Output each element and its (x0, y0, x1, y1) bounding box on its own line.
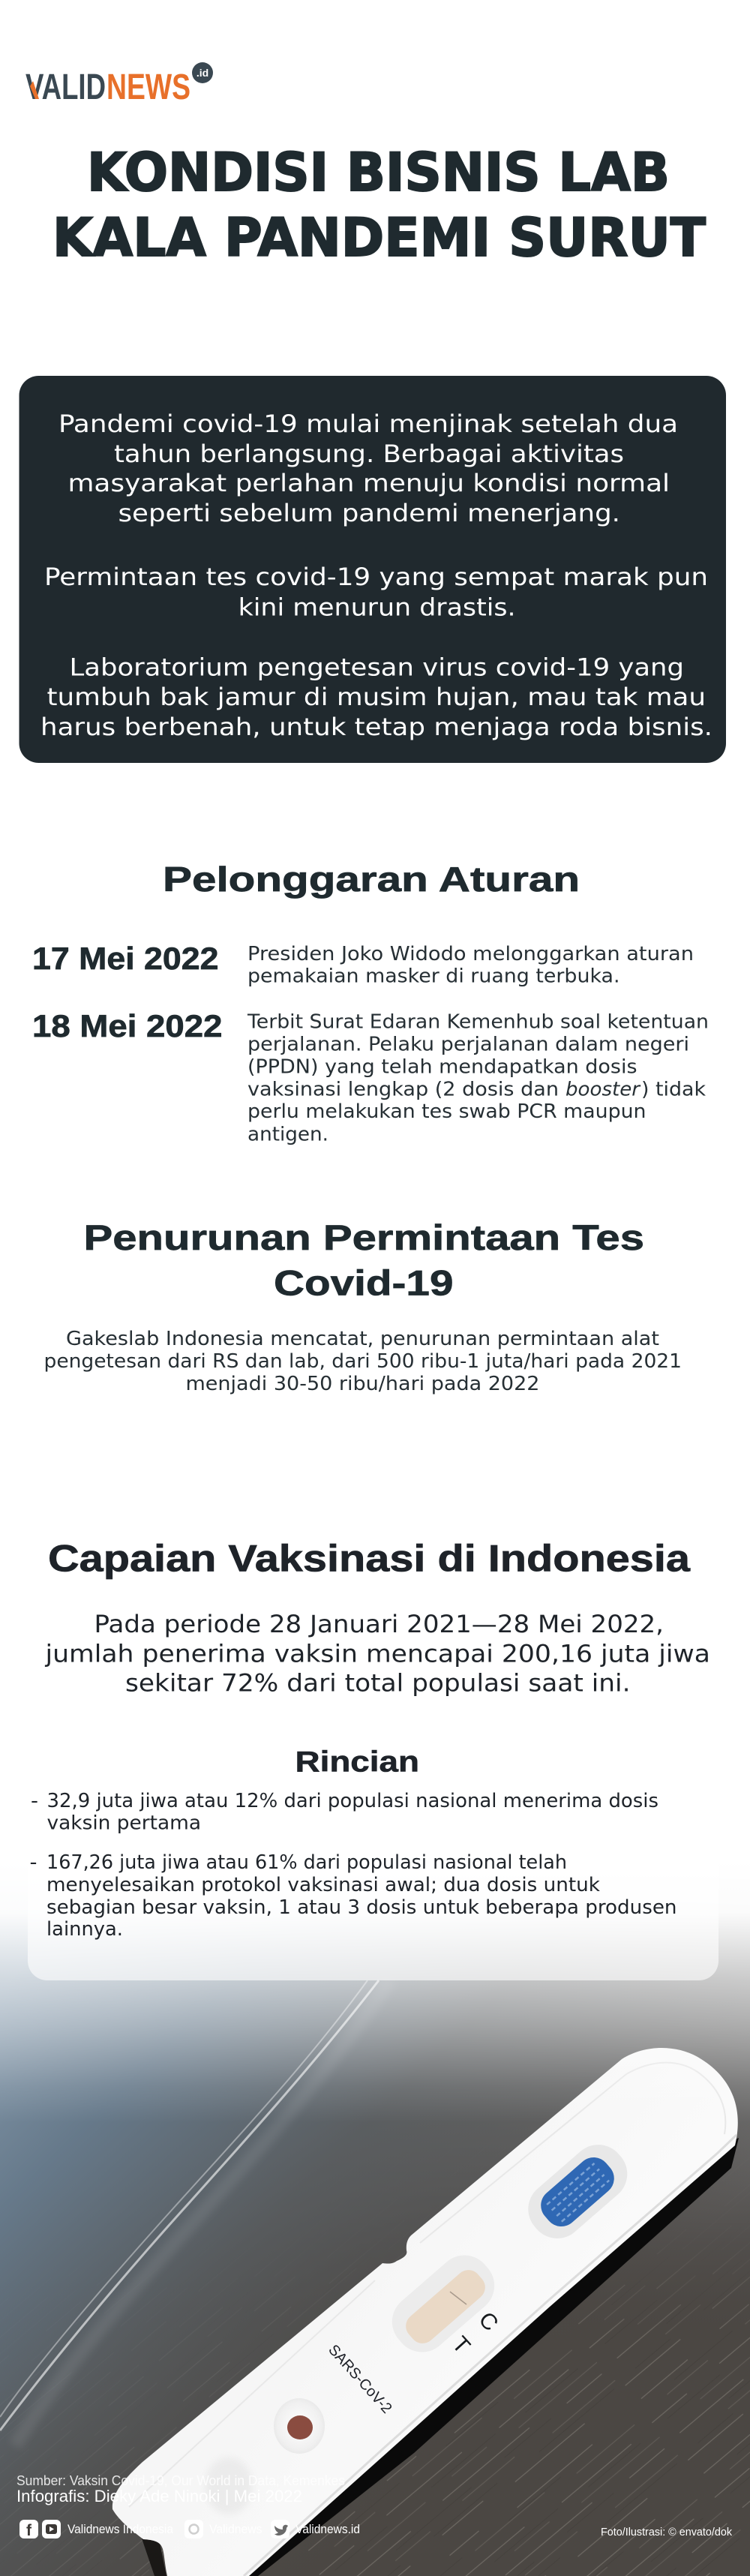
description 18 Mei: vaksinasi lengkap (2 dosis dan (248, 1079, 559, 1101)
description 18 Mei: (PPDN) yang telah mendapatkan dosis (248, 1056, 638, 1079)
list item 2 (30, 1851, 676, 1941)
test result window (400, 2265, 490, 2349)
list item 1: - (31, 1790, 38, 1812)
photo strip notch shadow (140, 2532, 166, 2576)
description 18 Mei: ) tidak (641, 1079, 706, 1101)
intro text: kini menurun drastis. (238, 593, 516, 621)
text: Gakeslab: pengetesan dari RS dan lab, dari 500 ribu-1 juta/hari pada 2021 (44, 1350, 682, 1373)
logo word NEWS: NEWS (106, 68, 190, 107)
photo upper grey reflection (0, 1860, 750, 2340)
photo glass streak (0, 1980, 390, 2445)
title (52, 142, 706, 269)
blue window recess (518, 2133, 638, 2250)
heading: Pelonggaran Aturan: Pelonggaran Aturan (163, 860, 580, 899)
panel: introduction (20, 376, 726, 763)
timeline: 18 Mei 2022 (32, 1008, 709, 1146)
intro text: Permintaan tes covid-19 yang sempat marak pun (44, 563, 708, 591)
description 18 Mei: Terbit Surat Edaran Kemenhub soal ketentuan (247, 1011, 709, 1034)
text: vaccination total: Pada periode 28 Januari 2021—28 Mei 2022, (94, 1610, 664, 1638)
text: Validnews.id: Validnews.id (296, 2522, 360, 2536)
intro text: harus berbenah, untuk tetap menjaga roda bisnis. (40, 713, 712, 741)
list: vaccination details (30, 1790, 676, 1941)
cassette side edge (244, 2135, 736, 2576)
list item 1: 32,9 juta jiwa atau 12% dari populasi nasional menerima dosis (46, 1790, 658, 1812)
description 17 Mei: pemakaian masker di ruang terbuka. (248, 965, 620, 987)
photo credit: Foto/Ilustrasi: © envato/dok (601, 2526, 732, 2538)
description 18 Mei (247, 1011, 709, 1146)
credits (16, 2473, 345, 2505)
test result recess (381, 2244, 506, 2363)
title: KONDISI BISNIS LAB (87, 142, 670, 203)
intro text: tumbuh bak jamur di musim hujan, mau tak mau (46, 683, 706, 711)
blood drop (287, 2415, 313, 2439)
logo word VALID: VALID (26, 68, 106, 107)
icon: twitter (271, 2520, 290, 2538)
blue desiccant window (534, 2151, 621, 2233)
cassette groove (129, 2063, 725, 2507)
icon: instagram (184, 2520, 203, 2538)
intro text: seperti sebelum pandemi menerjang. (118, 499, 620, 527)
text: vaccination total (44, 1610, 710, 1697)
white fade from page into photo (0, 1860, 750, 2123)
list item 2: menyelesaikan protokol vaksinasi awal; dua dosis untuk (46, 1874, 600, 1896)
photo: rapid test cassette on a wooden table (0, 1860, 750, 2576)
list item 1: vaksin pertama (46, 1812, 201, 1835)
source: Sumber: Vaksin Covid-19, Our World in Data, Kemenkes (16, 2473, 345, 2488)
description 18 Mei: booster (566, 1079, 641, 1101)
photo table surface (0, 1860, 750, 2576)
sample well (274, 2398, 325, 2454)
heading: Rincian: Rincian (296, 1746, 419, 1778)
text: Gakeslab: menjadi 30-50 ribu/hari pada 2022 (186, 1373, 540, 1395)
text: Gakeslab: Gakeslab Indonesia mencatat, penurunan permintaan alat (66, 1328, 659, 1350)
intro panel background (20, 376, 726, 763)
date 17 Mei 2022: 17 Mei 2022 (32, 941, 219, 976)
panel: translucent backing for vaccination details (28, 1800, 718, 1980)
heading: Penurunan Permintaan Tes Covid-19: Covid-19 (274, 1263, 453, 1302)
blue window pattern (547, 2163, 609, 2222)
label SARS-CoV-2: SARS-CoV-2 (325, 2342, 395, 2417)
photo test cassette (112, 2048, 738, 2576)
icon: facebook: f (26, 2522, 32, 2539)
photo strip shadow (225, 2138, 739, 2576)
icon: youtube (42, 2520, 61, 2538)
photo wood grain (0, 1860, 750, 2576)
heading: Penurunan Permintaan Tes Covid-19: Penurunan Permintaan Tes (84, 1217, 644, 1257)
heading: Capaian Vaksinasi di Indonesia: Capaian Vaksinasi di Indonesia (48, 1538, 691, 1580)
text: Gakeslab (44, 1328, 682, 1395)
T line (450, 2292, 466, 2304)
list item 2: 167,26 juta jiwa atau 61% dari populasi nasional telah (46, 1851, 567, 1874)
social links (20, 2520, 360, 2539)
intro text (40, 410, 712, 741)
description 18 Mei: antigen. (248, 1124, 328, 1146)
list item 2: sebagian besar vaksin, 1 atau 3 dosis untuk beberapa produsen (46, 1896, 676, 1919)
text: Validnews Indonesia: Validnews Indonesia (68, 2522, 173, 2536)
list item 1 (31, 1790, 658, 1835)
label C: C (474, 2307, 503, 2336)
description 17 Mei: Presiden Joko Widodo melonggarkan aturan (248, 943, 694, 965)
list item 2: lainnya. (46, 1918, 123, 1941)
text: Validnews: Validnews (209, 2522, 262, 2536)
cassette body (112, 2048, 738, 2576)
logo id text: .id (196, 67, 208, 79)
heading: Penurunan Permintaan Tes Covid-19 (84, 1217, 644, 1302)
timeline: 17 Mei 2022 (32, 941, 694, 987)
intro text: Laboratorium pengetesan virus covid-19 yang (69, 653, 684, 681)
description 17 Mei (248, 943, 694, 987)
title: KALA PANDEMI SURUT (52, 207, 706, 269)
lower well (205, 2457, 253, 2514)
author: Infografis: Dieky Ade Ninoki | Mei 2022 (16, 2487, 302, 2505)
logo id badge (192, 62, 213, 83)
intro text: tahun berlangsung. Berbagai aktivitas (114, 440, 624, 468)
text: vaccination total: sekitar 72% dari total populasi saat ini. (125, 1668, 630, 1697)
list item 2: - (30, 1851, 38, 1874)
intro text: Pandemi covid-19 mulai menjinak setelah dua (58, 410, 678, 438)
icon: facebook (20, 2520, 38, 2539)
label T: T (447, 2331, 475, 2358)
description 18 Mei: perjalanan. Pelaku perjalanan dalam negeri (248, 1034, 689, 1056)
photo blue reflection (0, 1860, 750, 2576)
logo V accent (30, 81, 39, 99)
logo (26, 62, 213, 107)
date 18 Mei 2022: 18 Mei 2022 (32, 1008, 222, 1043)
intro text: masyarakat perlahan menuju kondisi normal (68, 469, 670, 497)
text: vaccination total: jumlah penerima vaksin mencapai 200,16 juta jiwa (44, 1640, 710, 1668)
description 18 Mei: perlu melakukan tes swab PCR maupun (248, 1100, 646, 1123)
